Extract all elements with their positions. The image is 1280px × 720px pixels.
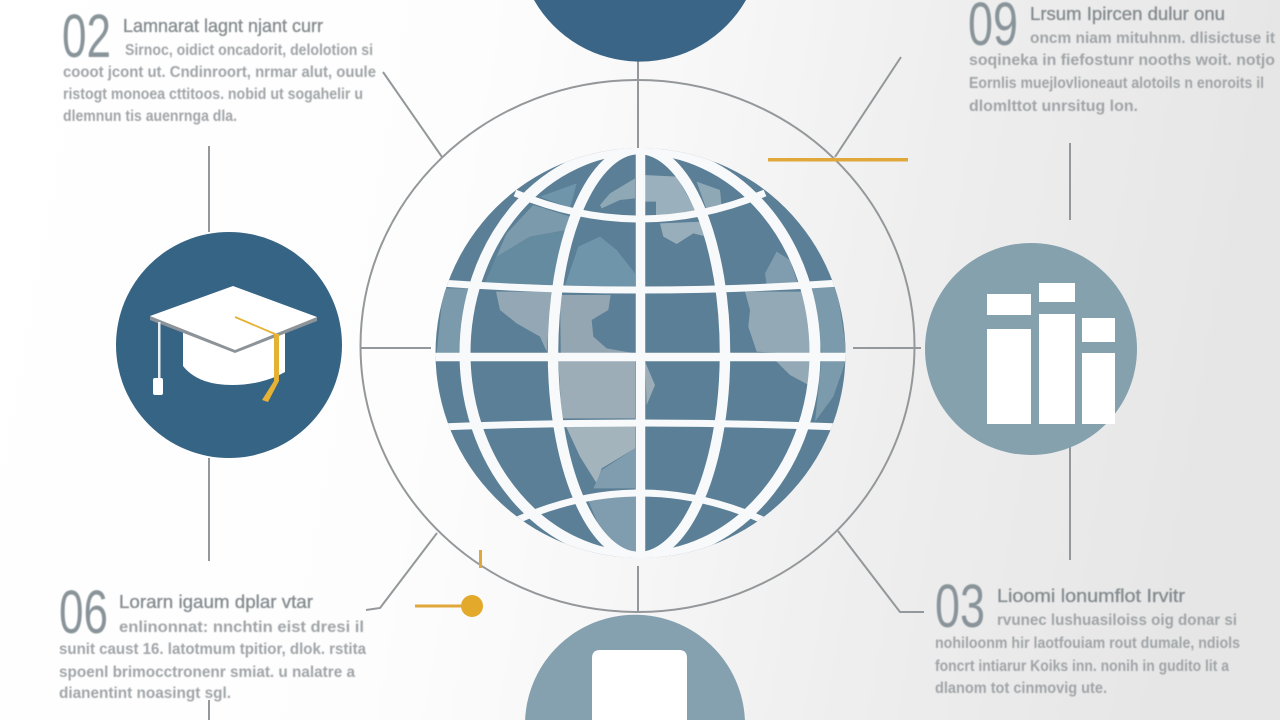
top circle: [534, 0, 746, 62]
accent: yellow line: [768, 158, 908, 162]
text block 02: ristogt monoea cttitoos. nobid ut sogahelir u: [63, 86, 363, 103]
text block 09: [968, 0, 1275, 115]
text block 03: Lioomi lonumflot Irvitr: [997, 586, 1185, 606]
text block 03: dlanom tot cinmovig ute.: [935, 680, 1107, 697]
text block 06: dianentint noasingt sgl.: [59, 685, 231, 702]
text block 09: dlomlttot unrsitug lon.: [969, 98, 1138, 115]
globe: [430, 148, 850, 558]
text block 02: Sirnoc, oidict oncadorit, delolotion si: [125, 42, 373, 59]
accent: yellow dot with line: [415, 595, 483, 617]
text block 06: [59, 578, 366, 702]
left circle: graduation cap: [116, 232, 342, 458]
text block 03: rvunec lushuasiloiss oig donar si: [997, 612, 1237, 629]
text block 09: oncm niam mituhnm. dlisictuse it: [1030, 30, 1275, 47]
icon: bars: [987, 283, 1115, 424]
text block 03: 03: [935, 572, 985, 640]
outer ring with connector lines: [209, 57, 1070, 720]
text block 02: cooot jcont ut. Cndinroort, nrmar alut, ouule: [63, 64, 376, 81]
text block 03: nohiloonm hir laotfouiam rout dumale, ndiols: [935, 635, 1240, 652]
text block 02: dlemnun tis auenrnga dla.: [63, 108, 237, 125]
icon: graduation cap: [150, 286, 317, 402]
right circle: bar icon: [925, 243, 1137, 455]
text block 06: spoenl brimocctronenr smiat. u nalatre a: [59, 664, 355, 681]
text block 03: [935, 572, 1240, 697]
text block 02: 02: [62, 2, 111, 70]
bottom circle with device icon: [525, 615, 745, 720]
accent: yellow tick: [479, 550, 482, 568]
graticule: [430, 148, 850, 558]
text block 09: Lrsum Ipircen dulur onu: [1030, 4, 1225, 24]
text block 06: 06: [59, 578, 108, 646]
text block 06: sunit caust 16. latotmum tpitior, dlok. rstita: [59, 641, 366, 658]
continents: [437, 175, 847, 555]
text block 03: foncrt intiarur Koiks inn. nonih in gudito lit a: [935, 658, 1229, 675]
text block 02: Lamnarat lagnt njant curr: [123, 16, 323, 36]
text block 09: soqineka in fiefostunr nooths woit. notjo: [969, 52, 1275, 69]
text block 02: [62, 2, 376, 125]
text block 06: Lorarn igaum dplar vtar: [119, 592, 313, 612]
text block 06: enlinonnat: nnchtin eist dresi il: [119, 619, 364, 636]
